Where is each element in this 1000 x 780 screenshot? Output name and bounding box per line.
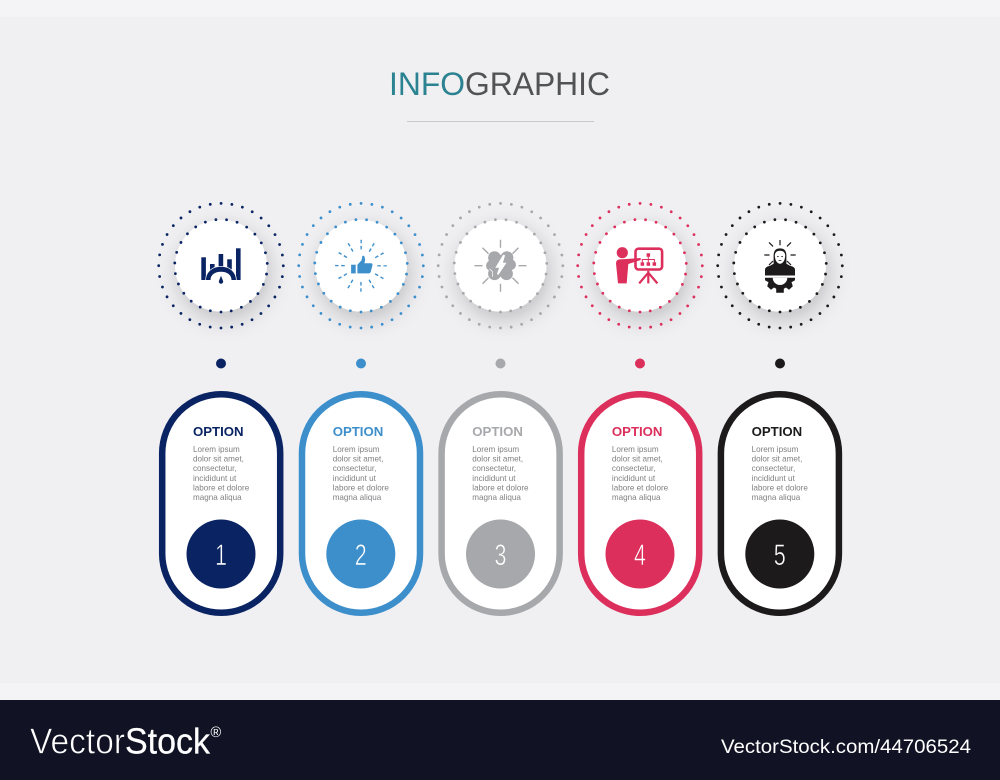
text block: consectetur,	[193, 464, 237, 473]
number badge	[745, 520, 814, 588]
text block: Lorem ipsum	[612, 445, 659, 454]
text block: incididunt ut	[752, 474, 796, 483]
panel: option 2	[302, 394, 420, 613]
text block: magna aliqua	[612, 493, 661, 502]
icon circle 1: gauge and bars	[159, 203, 283, 328]
text block: labore et dolore	[752, 483, 808, 492]
heading: OPTION	[472, 424, 523, 439]
number badge	[186, 520, 256, 588]
icon: presenter and board	[616, 247, 662, 283]
text block: dolor sit amet,	[333, 455, 384, 464]
connector dot 2	[356, 358, 366, 368]
text block: incididunt ut	[333, 474, 377, 483]
icon circle 3: brain	[438, 203, 563, 328]
footer band	[0, 700, 1000, 780]
text block: Lorem ipsum	[752, 445, 799, 454]
icon circle 2: thumbs up	[299, 203, 423, 328]
icon circle 4: presenter	[578, 203, 702, 328]
logo: ®	[210, 725, 222, 741]
number badge: 2	[355, 539, 367, 572]
text block: labore et dolore	[612, 483, 669, 492]
text block: incididunt ut	[612, 474, 656, 483]
heading: OPTION	[752, 424, 802, 439]
logo: Vector	[30, 720, 125, 761]
icon: brain with lightning bolt	[474, 240, 526, 292]
number badge	[606, 520, 674, 588]
text block: consectetur,	[752, 464, 795, 473]
heading: OPTION	[612, 424, 662, 439]
image id: VectorStock.com/44706524	[721, 736, 971, 758]
text block: magna aliqua	[193, 493, 242, 502]
text block: magna aliqua	[752, 493, 801, 502]
text block: incididunt ut	[472, 474, 516, 483]
text block: consectetur,	[612, 464, 656, 473]
heading: OPTION	[333, 424, 383, 439]
connector dot 5	[775, 358, 785, 368]
connector dot 3	[496, 358, 506, 368]
number badge: 1	[215, 539, 227, 572]
heading: OPTION	[193, 424, 244, 439]
text block: labore et dolore	[193, 483, 250, 492]
text block: dolor sit amet,	[612, 455, 663, 464]
text block: Lorem ipsum	[193, 445, 240, 454]
panel: option 3	[442, 394, 560, 613]
text block: consectetur,	[472, 464, 516, 473]
panel: option 4	[581, 394, 699, 613]
text block: labore et dolore	[472, 483, 529, 492]
icon: person with idea and gear	[764, 240, 796, 293]
text block: consectetur,	[333, 464, 376, 473]
panel: option 1	[162, 394, 280, 613]
icon circle 5: engineer	[718, 203, 842, 328]
text block: incididunt ut	[193, 474, 237, 483]
text block: magna aliqua	[472, 493, 521, 502]
text block: Lorem ipsum	[333, 445, 380, 454]
title: INFOGRAPHIC	[389, 66, 610, 102]
icon: gauge and bars	[201, 248, 241, 284]
number badge: 3	[494, 539, 506, 572]
logo	[30, 720, 222, 761]
connector dot 1	[216, 358, 226, 368]
text block: dolor sit amet,	[752, 455, 802, 464]
text block: dolor sit amet,	[472, 455, 523, 464]
number badge: 4	[634, 539, 646, 572]
text block: Lorem ipsum	[472, 445, 519, 454]
connector dot 4	[635, 358, 645, 368]
icon: thumbs up with rays	[337, 242, 385, 290]
number badge	[466, 520, 535, 588]
number badge: 5	[774, 539, 786, 572]
panel: option 5	[721, 394, 839, 613]
logo: Stock	[125, 720, 211, 761]
text block: labore et dolore	[333, 483, 389, 492]
text block: magna aliqua	[333, 493, 382, 502]
text block: dolor sit amet,	[193, 455, 244, 464]
number badge	[326, 520, 395, 588]
